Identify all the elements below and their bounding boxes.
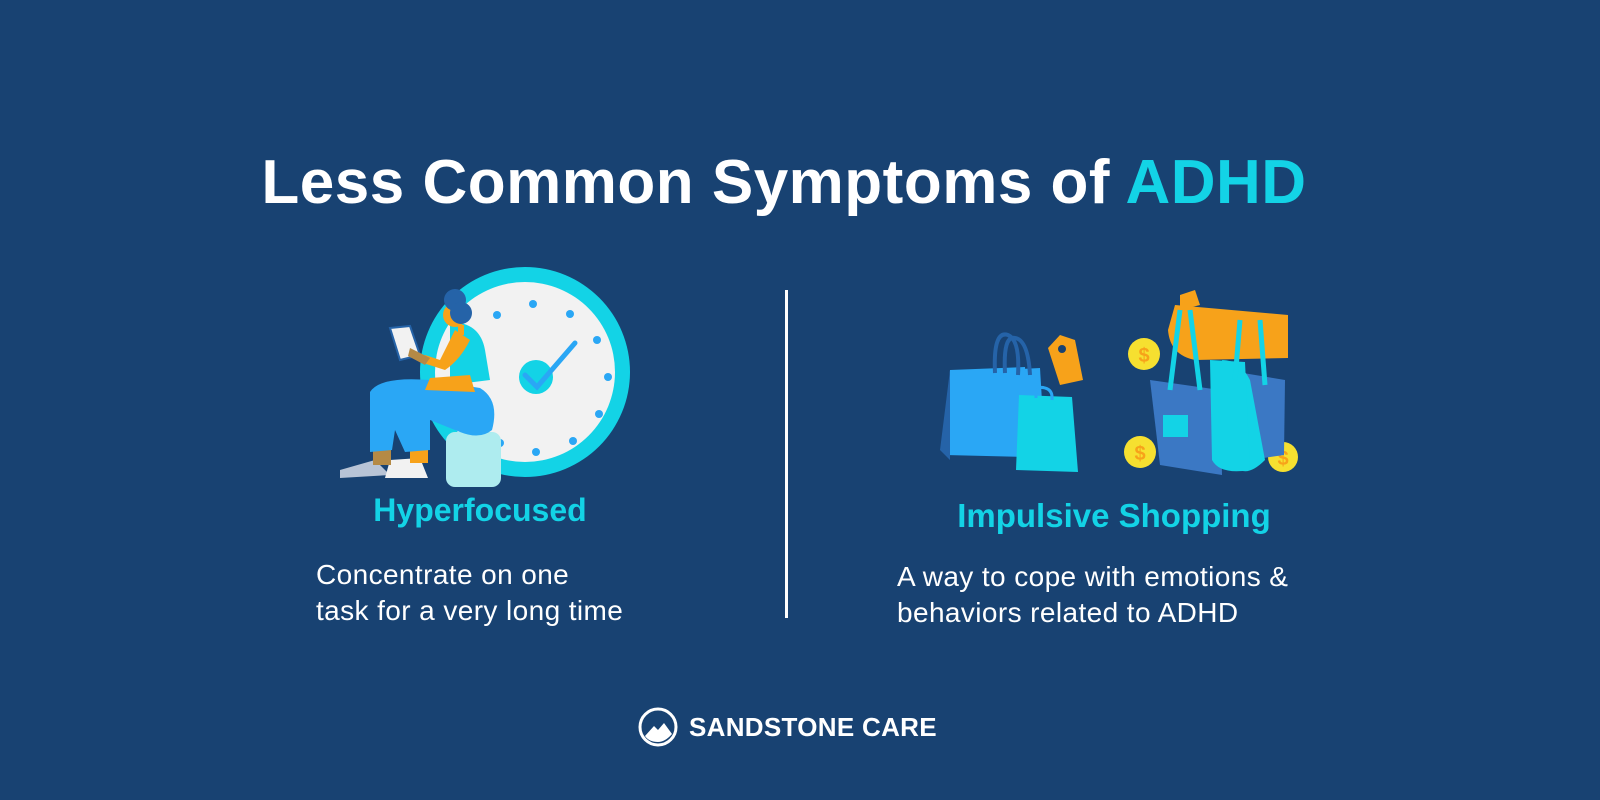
illustration: shopping bags: $ — [1138, 345, 1150, 367]
text: shopping description — [897, 561, 1288, 628]
panel: impulsive shopping — [897, 290, 1298, 628]
title: Less Common Symptoms of ADHD — [261, 148, 1307, 217]
illustration: shopping bags: $ — [1134, 443, 1146, 465]
text: brand name: SANDSTONE CARE — [689, 712, 937, 742]
icon: mountain circle — [638, 708, 678, 746]
illustration: shopping bags: $ — [1277, 448, 1289, 470]
text: shopping description: A way to cope with emotions & — [897, 561, 1288, 592]
text: hyperfocused description: task for a very long time — [316, 595, 623, 626]
illustration: shopping bags — [940, 290, 1298, 475]
divider — [785, 290, 788, 618]
text: hyperfocused description — [316, 559, 623, 626]
text: hyperfocused description: Concentrate on one — [316, 559, 569, 590]
heading: Impulsive Shopping: Impulsive Shopping — [957, 497, 1271, 534]
illustration: woman with clock — [340, 267, 630, 487]
heading: Hyperfocused: Hyperfocused — [373, 492, 587, 528]
logo: Sandstone Care — [638, 708, 937, 746]
text: shopping description: behaviors related to ADHD — [897, 597, 1239, 628]
panel: hyperfocused — [316, 267, 630, 626]
